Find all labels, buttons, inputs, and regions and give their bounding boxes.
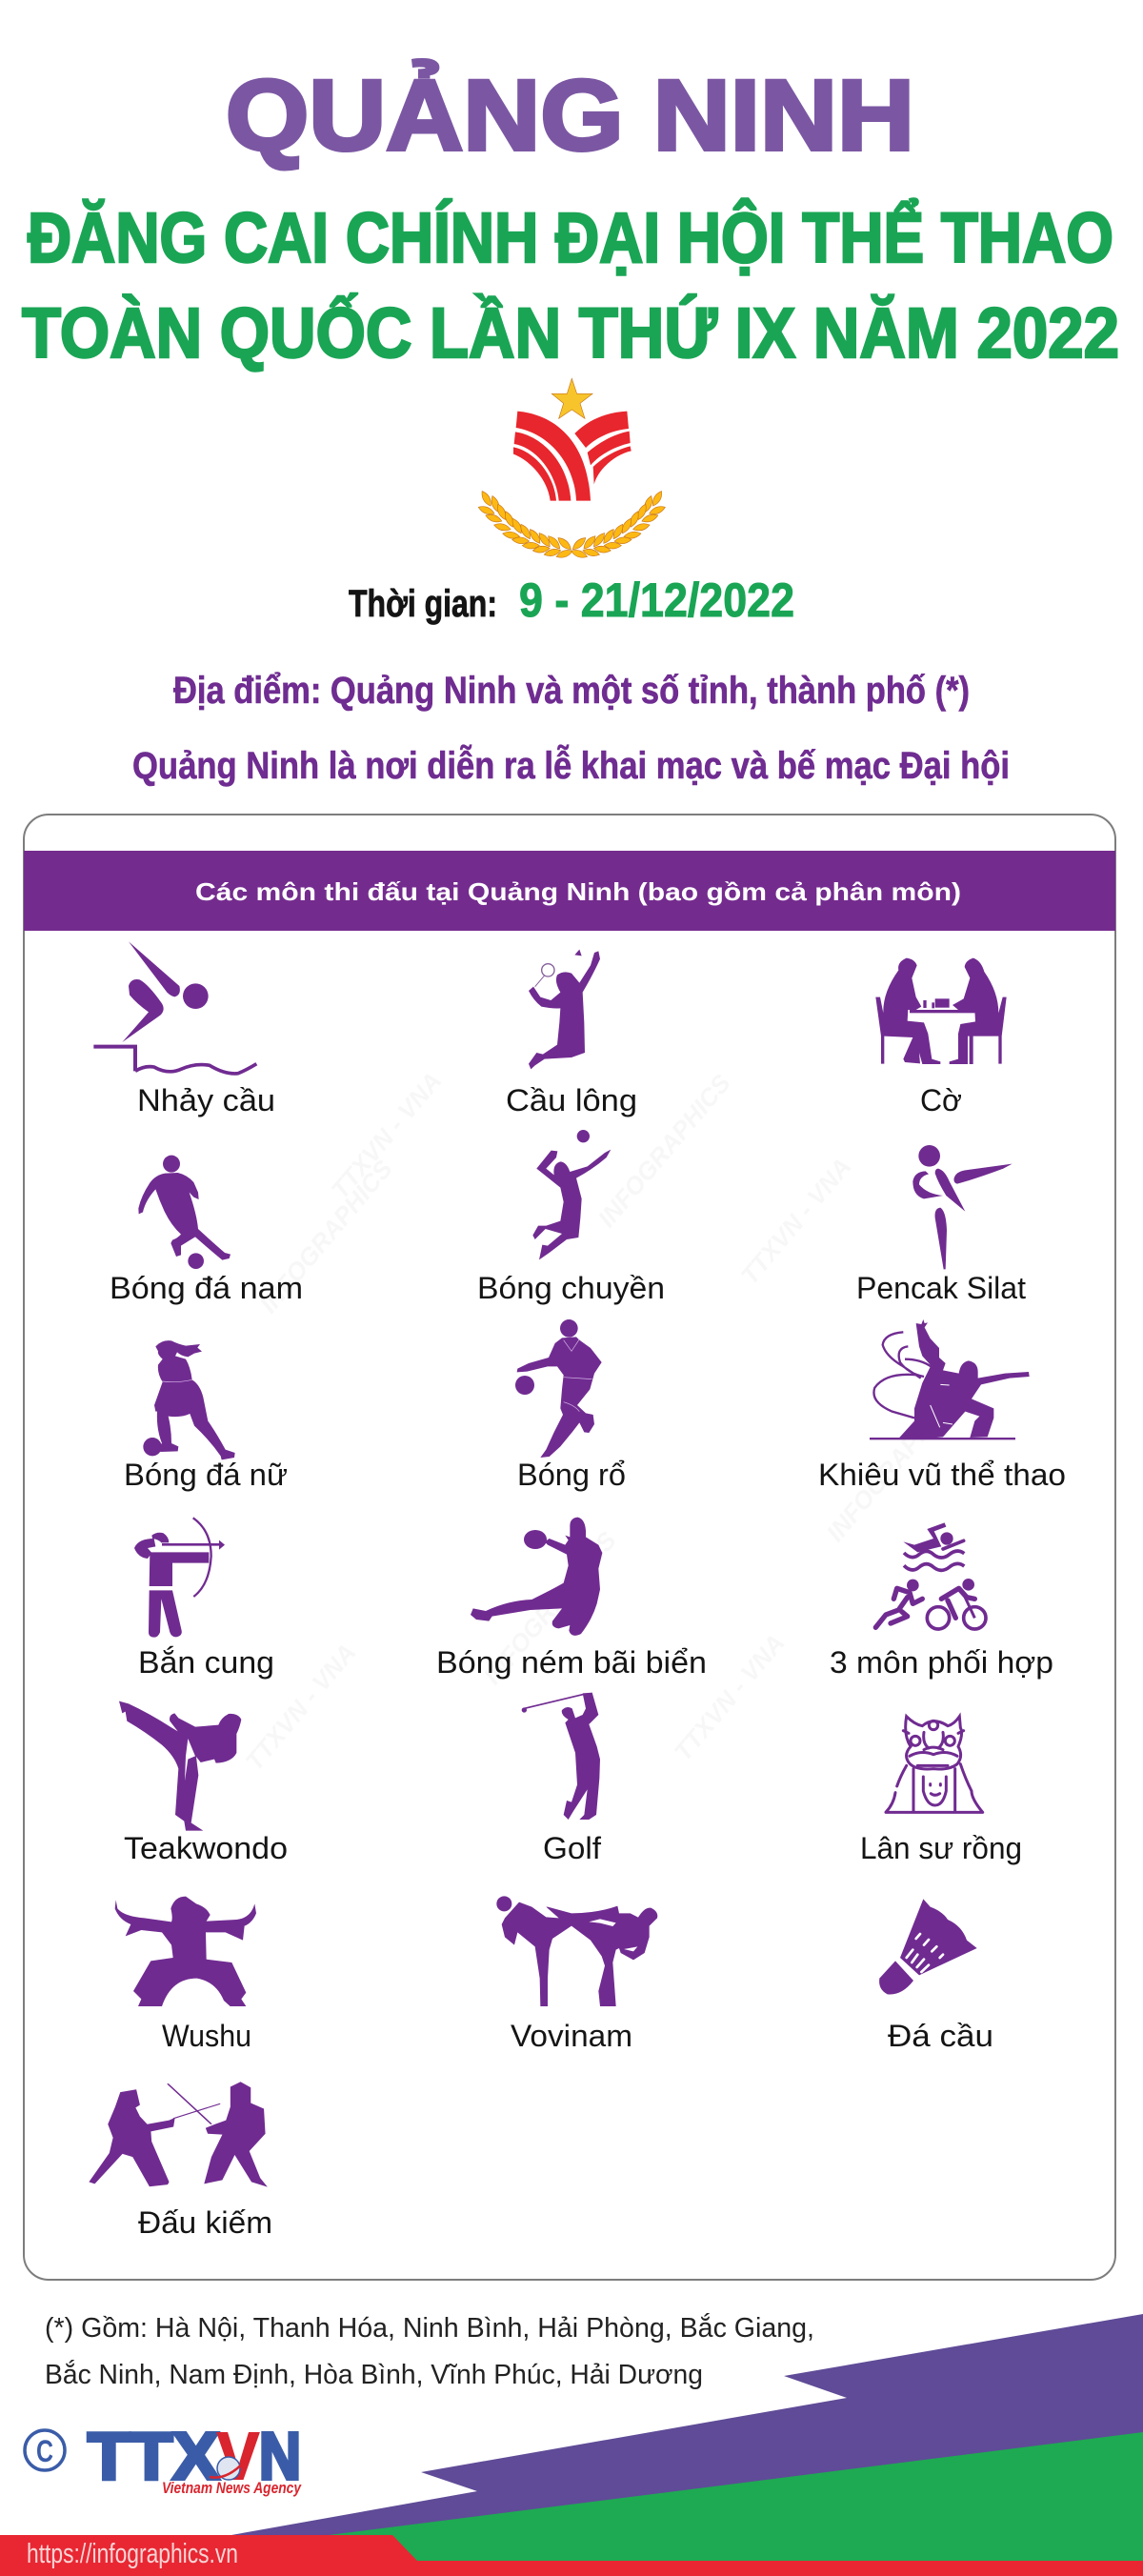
logo: TTXVN copyright xyxy=(25,2419,302,2497)
icon: chess xyxy=(875,958,1007,1064)
label: Bóng rổ: Bóng rổ xyxy=(517,1458,626,1492)
icon: games emblem xyxy=(477,378,667,560)
panel header band xyxy=(24,851,1115,931)
label: Golf: Golf xyxy=(543,1831,601,1865)
watermarks xyxy=(240,1067,965,1776)
watermarks: INFOGRAPHICS xyxy=(821,1382,965,1547)
label: Lân sư rồng: Lân sư rồng xyxy=(860,1831,1022,1865)
icon: dance sport xyxy=(870,1319,1030,1439)
label: Bắn cung: Bắn cung xyxy=(138,1645,274,1680)
icon: triathlon xyxy=(875,1522,986,1629)
watermarks: INFOGRAPHICS xyxy=(478,1525,622,1690)
panel header text: Các môn thi đấu tại Quảng Ninh (bao gồm cả phân môn) xyxy=(195,877,961,906)
watermarks: INFOGRAPHICS xyxy=(254,1154,398,1318)
footer url: https://infographics.vn xyxy=(27,2539,238,2569)
label: Đấu kiếm: Đấu kiếm xyxy=(138,2205,272,2240)
watermarks: TTXVN - VNA xyxy=(669,1629,791,1766)
icon: men's football xyxy=(138,1156,231,1269)
icon: lion dragon dance xyxy=(886,1717,983,1812)
logo: TTXVN copyright: V xyxy=(217,2419,259,2493)
footer shape: purple wedge xyxy=(231,2314,1143,2535)
icon: fencing xyxy=(89,2082,268,2187)
title: Quảng Ninh: QUẢNG NINH xyxy=(226,58,914,171)
watermarks: TTXVN - VNA xyxy=(240,1639,362,1776)
panel: sports list xyxy=(24,815,1115,2280)
label: Pencak Silat: Pencak Silat xyxy=(856,1271,1026,1305)
watermarks: INFOGRAPHICS xyxy=(592,1068,736,1233)
venue line: Địa điểm: Quảng Ninh và một số tỉnh, thành phố (*) xyxy=(173,670,970,712)
watermarks: TTXVN - VNA xyxy=(326,1067,448,1204)
icon: vovinam xyxy=(496,1896,657,2006)
logo: TTXVN copyright: C xyxy=(36,2434,53,2468)
icon: volleyball xyxy=(532,1130,611,1259)
icon: golf xyxy=(522,1693,600,1820)
date value: 9 - 21/12/2022 xyxy=(519,574,794,627)
logo: TTXVN copyright: Vietnam News Agency xyxy=(162,2479,302,2497)
icon: women's football xyxy=(143,1340,235,1459)
label: Cờ: Cờ xyxy=(920,1083,962,1117)
footer shape: red band xyxy=(0,2535,1143,2576)
label: Bóng ném bãi biển: Bóng ném bãi biển xyxy=(436,1645,707,1680)
label: Đá cầu: Đá cầu xyxy=(888,2019,993,2053)
logo: TTXVN copyright: TTX xyxy=(88,2419,219,2493)
footnote xyxy=(45,2312,814,2390)
icon: archery xyxy=(134,1518,225,1638)
label: Vovinam: Vovinam xyxy=(511,2019,632,2053)
footnote: (*) Gồm: Hà Nội, Thanh Hóa, Ninh Bình, Hải Phòng, Bắc Giang, xyxy=(45,2312,814,2344)
label: Teakwondo: Teakwondo xyxy=(124,1831,288,1865)
label: Bóng đá nam: Bóng đá nam xyxy=(110,1271,303,1305)
label: Wushu: Wushu xyxy=(162,2019,251,2053)
date label: Thời gian: xyxy=(349,583,497,625)
icon: wushu xyxy=(115,1897,256,2006)
footer shape: green wedge xyxy=(321,2432,1143,2563)
ceremony line: Quảng Ninh là nơi diễn ra lễ khai mạc và bế mạc Đại hội xyxy=(132,743,1010,787)
logo: TTXVN copyright: N xyxy=(259,2419,301,2493)
footnote: Bắc Ninh, Nam Định, Hòa Bình, Vĩnh Phúc, Hải Dương xyxy=(45,2359,703,2390)
icon: beach handball xyxy=(471,1518,602,1636)
label: 3 môn phối hợp: 3 môn phối hợp xyxy=(830,1645,1053,1680)
label: Bóng chuyền: Bóng chuyền xyxy=(477,1271,665,1305)
icon: diving xyxy=(93,941,256,1074)
label: Cầu lông: Cầu lông xyxy=(506,1083,637,1117)
label: Nhảy cầu: Nhảy cầu xyxy=(137,1083,275,1117)
icon: badminton xyxy=(529,950,600,1069)
label: Khiêu vũ thể thao: Khiêu vũ thể thao xyxy=(818,1458,1066,1492)
icon: basketball xyxy=(515,1319,602,1458)
icon: pencak silat xyxy=(912,1145,1013,1269)
label: Bóng đá nữ: Bóng đá nữ xyxy=(124,1458,288,1492)
watermarks: TTXVN - VNA xyxy=(735,1153,857,1290)
icon: taekwondo xyxy=(119,1701,241,1831)
icon: shuttlecock xyxy=(879,1899,977,1994)
